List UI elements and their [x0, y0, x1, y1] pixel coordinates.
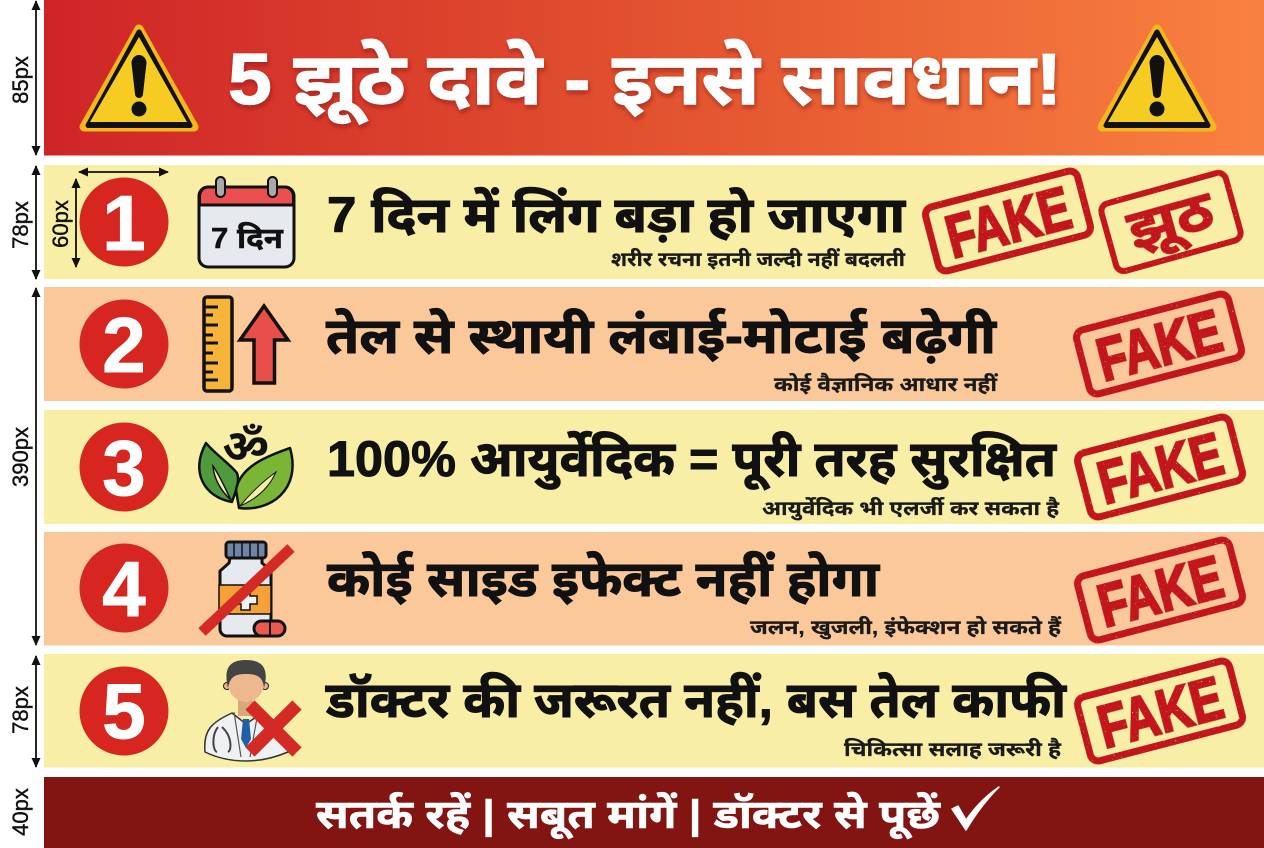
number badge 3: 3 [102, 424, 146, 512]
claim note 2: कोई वैज्ञानिक आधार नहीं [774, 372, 998, 396]
stamp: FAKE 4: FAKE [1091, 543, 1230, 640]
claim heading 1: 7 दिन में लिंग बड़ा हो जाएगा [327, 187, 906, 243]
title: 5 झूठे दावे - इनसे सावधान! [228, 39, 1062, 125]
claim heading 3: 100% आयुर्वेदिक = पूरी तरह सुरक्षित [327, 431, 1057, 491]
footer banner [44, 777, 1264, 848]
icon: calendar: 7 दिन [211, 222, 284, 255]
stamp: FAKE 2: FAKE [1090, 297, 1229, 394]
claim heading 5: डॉक्टर की जरूरत नहीं, बस तेल काफी [325, 672, 1067, 728]
number badge 1 [80, 178, 168, 267]
dimension annotations: 40px [8, 788, 33, 836]
number badge 5 [80, 666, 168, 756]
number badge 5: 5 [102, 667, 146, 755]
header banner [44, 0, 1264, 156]
panel: claim 3 [44, 410, 1264, 524]
icon: check mark [952, 787, 999, 830]
dimension annotations: 78px [8, 201, 33, 249]
dimension annotations [8, 1, 168, 836]
number badge 1: 1 [102, 179, 146, 267]
number badge 4 [80, 544, 168, 633]
stamp: jhooth [1099, 171, 1243, 273]
icon: medicine bottle crossed [202, 542, 291, 636]
number badge 2 [80, 300, 168, 389]
icon: warning triangle right [1102, 29, 1212, 127]
panel: claim 2 [44, 287, 1264, 401]
stamp: FAKE 5: FAKE [1091, 664, 1230, 761]
claim heading 4: कोई साइड इफेक्ट नहीं होगा [327, 551, 880, 607]
claim note 4: जलन, खुजली, इंफेक्शन हो सकते हैं [750, 615, 1062, 640]
icon: warning triangle left [84, 29, 194, 127]
dimension annotations: 60px [48, 200, 73, 248]
icon: ruler and up arrow [204, 297, 288, 391]
panel: claim 4 [44, 532, 1264, 646]
dimension annotations: 85px [8, 56, 33, 104]
dimension annotations: 78px [8, 686, 33, 734]
panel: claim 5 [44, 654, 1264, 768]
stamp: jhooth: झूठ [1121, 179, 1222, 264]
icon: calendar [199, 177, 294, 267]
number badge 2: 2 [102, 301, 146, 389]
panel: claim 1 [44, 165, 1264, 279]
claim heading 2: तेल से स्थायी लंबाई-मोटाई बढ़ेगी [326, 308, 997, 364]
icon: doctor crossed [205, 660, 297, 761]
claim note 3: आयुर्वेदिक भी एलर्जी कर सकता है [762, 496, 1060, 521]
dimension annotations: 390px [8, 427, 33, 487]
stamp: FAKE 3: FAKE [1091, 420, 1230, 517]
number badge 3 [80, 422, 168, 512]
number badge 4: 4 [102, 545, 146, 633]
icon: om and leaves: ॐ [222, 420, 270, 472]
icon: om and leaves [199, 420, 293, 508]
claim note 5: चिकित्सा सलाह जरूरी है [844, 737, 1062, 761]
footer message: सतर्क रहें | सबूत मांगें | डॉक्टर से पूछें [316, 792, 941, 839]
claim note 1: शरीर रचना इतनी जल्दी नहीं बदलती [611, 247, 906, 271]
stamp: FAKE 1: FAKE [939, 174, 1078, 271]
